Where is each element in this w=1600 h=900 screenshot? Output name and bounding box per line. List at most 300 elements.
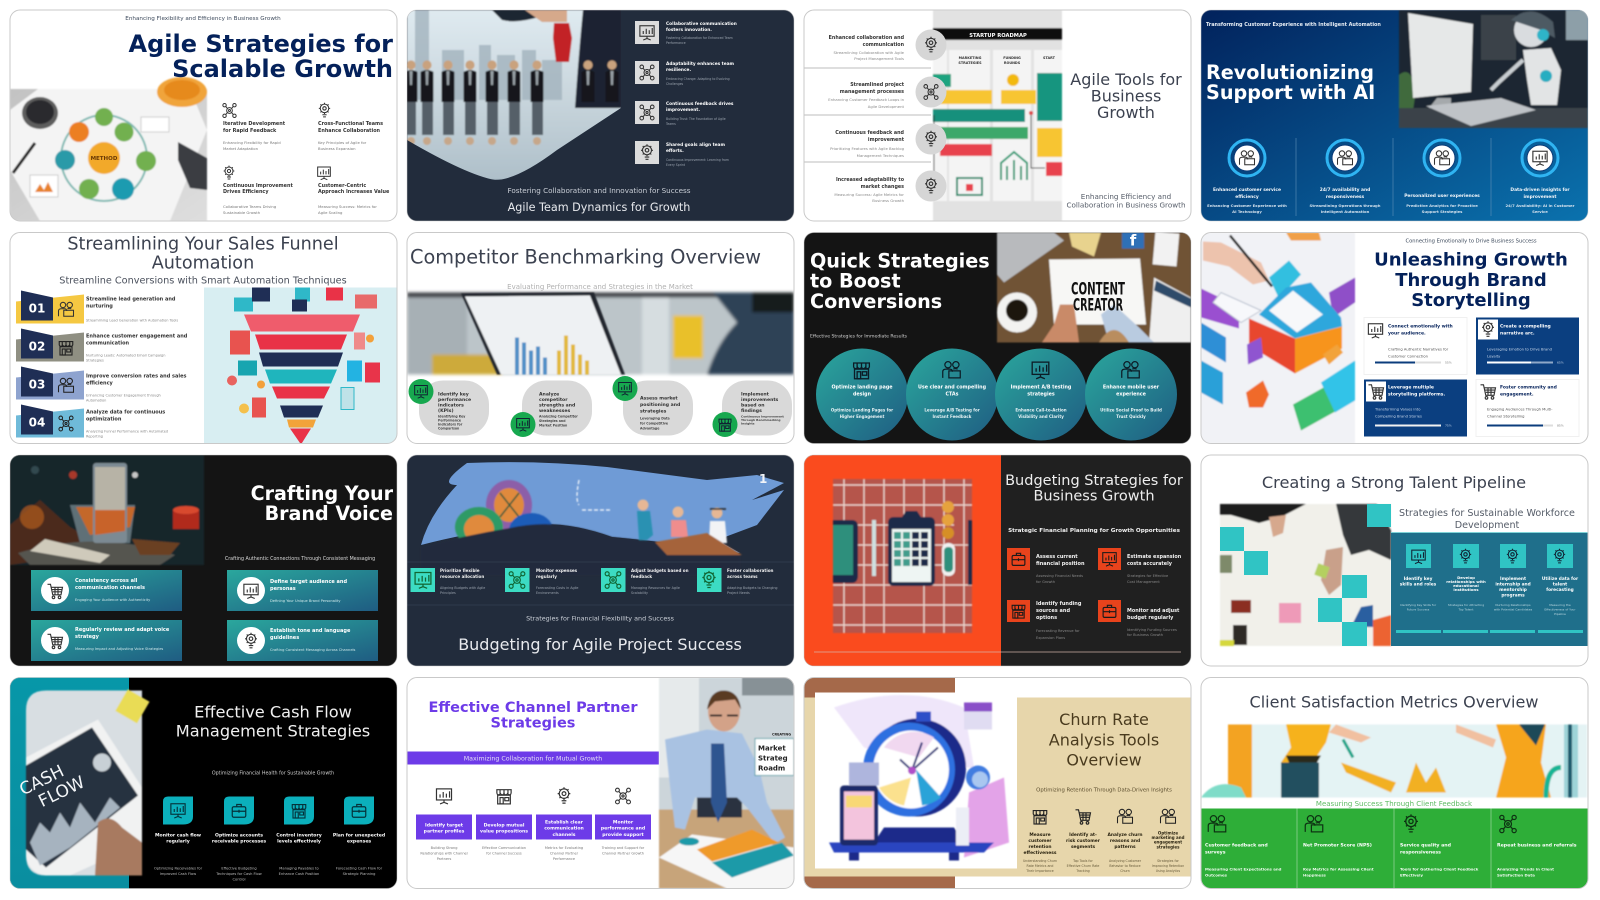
item: measure retention: effectiveness [1024,850,1057,856]
title: Effective Channel Partner [429,700,638,716]
title: Overview [1066,750,1142,770]
slide: Effective Channel Partner Strategies [407,678,794,888]
item: at-risk segments [1066,810,1101,873]
item: monitor performance: Monitor [613,820,634,826]
item: unexpected expenses: Strategic Planning [343,872,375,876]
item: enhanced collaboration: Streamlining Collaboration with Agile [833,50,905,55]
item: data-driven insights: Data-driven insights for [1510,187,1570,193]
title: Agile Tools for [1070,70,1182,89]
item: financial position: for Growth [1036,580,1055,584]
item: iterative development [223,103,286,151]
item: monitor cash flow [154,796,203,876]
title: Revolutionizing [1206,61,1374,84]
item: communication channels: Channel Partner [550,852,579,856]
item: implement improvements [712,380,792,437]
item: foster collaboration [697,568,778,595]
card: connect emotionally: Connect emotionally with [1388,324,1453,330]
item: communication channels: communication [544,826,584,832]
item: enhanced collaboration [829,30,946,61]
item: 24/7 availability: Streamlining Operations through [1310,203,1381,208]
item: enhanced collaboration: Enhanced collaboration and [829,35,905,41]
item: monitor cash flow: Optimizing Receivables for [154,866,203,870]
item: monitor performance: Channel Partner Growth [602,852,644,856]
item: monitor expenses: Environments [536,591,559,595]
item: monitor performance: Training and Support for [601,846,645,850]
item: monitor expenses: Monitor expenses [536,568,578,573]
image: cash flow tablet: FLOW [35,772,88,812]
item: value propositions: Effective Communication [482,846,526,850]
item: estimate expansion costs: Cost Management [1127,580,1160,584]
item: streamlined project management: Enhancing Customer Feedback Loops in [828,97,905,102]
item 02: Nurturing Leads: Automated Email Campaign [86,354,166,358]
subtitle: Optimizing Retention Through Data-Driven Insights [1036,788,1172,794]
item: continuous feedback: Continuous feedback drives [666,101,734,107]
title: Churn Rate [1059,710,1149,729]
item 03: Enhancing Customer Engagement through [86,394,161,398]
item: repeat business: Satisfaction Data [1497,872,1535,878]
item: foster collaboration: across teams [727,574,758,579]
slide: Churn Rate Analysis Tools Overview [804,678,1191,888]
slide: Budgeting for Agile Project Success [407,455,794,666]
item: implement improvements: findings [741,408,762,414]
item: cross-functional teams: Business Expansion [318,146,356,151]
subtitle: Transforming Customer Experience with Intelligent Automation [1206,22,1381,28]
item: internship programs: mentorship [1499,587,1527,593]
item: cross-functional teams [318,103,383,151]
item: continuous feedback: Management Techniques [857,153,904,158]
item: service quality: Tools for Gathering Client Feedback [1400,866,1479,872]
item: marketing strategies: Optimize [1158,830,1178,836]
title: Effective Cash Flow [194,702,352,722]
item: identify KPIs: Indicators for [438,422,463,426]
item: A/B testing [995,348,1087,440]
item: monitor performance: provide support [602,832,645,838]
title: Business [1091,86,1161,106]
item: feedback surveys [1205,816,1282,878]
item: continuous improvement: Drives Efficiency [223,189,269,195]
item: target audience [227,570,378,611]
item: clear CTAs: Use clear and compelling [918,384,987,390]
item: measure retention: retention [1028,844,1052,850]
subtitle: Enhancing Efficiency and [1081,192,1171,201]
item: communication channels [536,787,592,861]
item: personalized experiences: Support Strategies [1422,209,1463,214]
item: talent forecasting: Effectiveness of Your [1544,608,1576,612]
item: enhanced service: Enhanced customer service [1213,187,1281,193]
image: content creator desk: CREATOR [1073,296,1123,316]
item: customer-centric approach: Customer-Centric [318,183,366,189]
panel: strategy columns [1391,532,1588,646]
item: assess market [612,376,693,436]
item: consistency [31,570,182,611]
item: adjust budgets: feedback [631,574,652,579]
item: churn reasons: reasons and [1110,838,1140,844]
item: monitor cash flow: Monitor cash flow [155,832,202,838]
item: educational relationships: Develop [1457,575,1475,580]
card: connect emotionally: Crafting Authentic Narratives for [1388,348,1449,352]
image: man at a marketing roadmap: Market [758,744,786,752]
item: at-risk segments: risk customer [1066,838,1101,844]
card: community and engagement: Foster community and [1500,384,1557,390]
item: identify KPIs: Identify key [438,392,469,398]
slide: Agile Tools for Business Growth [804,10,1191,221]
item: internship programs: with Potential Candidates [1494,608,1533,612]
item 04: Analyzing Funnel Performance with Automated [86,430,168,434]
item: communication channels: channels [552,832,576,838]
item: marketing strategies: strategies [1157,844,1180,850]
item: landing page: Optimize landing page [831,384,893,390]
item: implement improvements: Continuous Improvement [741,414,784,418]
item: adaptability: Embracing Change: Adapting to Evolving [666,77,730,81]
item: estimate expansion costs: Strategies for Effective [1127,574,1169,578]
image: startup roadmap board: STARTUP ROADMAP [969,33,1027,39]
item: control inventory [276,796,322,876]
image: content creator desk [997,232,1191,342]
item: iterative development: Enhancing Flexibility for Rapid [223,140,281,145]
item: A/B testing: Visibility and Clarity [1018,414,1064,419]
item: funding sources [1007,600,1082,640]
item: target audience: Define target audience and [270,579,347,585]
item: partner profiles [416,789,472,861]
item: customer-centric approach: Measuring Success: Metrics for [318,204,377,209]
card: community and engagement: 85% [1557,424,1564,428]
item: personalized experiences [1404,140,1480,214]
item: communication channels: Establish clear [545,820,584,826]
item: foster collaboration: Foster collaboration [727,568,774,573]
item: 24/7 availability: responsiveness [1326,194,1365,200]
card: multiple platforms: storytelling platforms. [1388,392,1445,398]
item: adjust budgets: Managing Resources for Agile [631,586,680,590]
item: churn reasons: Analyzing Customer [1109,859,1142,863]
item: marketing strategies [1152,809,1185,873]
item: cross-functional teams: Key Principles of Agile for [318,140,367,145]
item: tone and language [227,620,378,661]
image: man at a marketing roadmap: Strateg [758,754,788,762]
subtitle: Strategic Financial Planning for Growth Opportunities [1008,528,1181,534]
item: analyze competitor: Market Position [539,424,568,428]
item: tone and language: guidelines [270,635,299,641]
item: repeat business [1497,815,1577,878]
card: compelling narrative: narrative arc. [1500,330,1535,336]
slide: Budgeting Strategies for Business Growth [804,455,1191,666]
slide: Agile Team Dynamics for Growth [404,10,794,221]
title: Support with AI [1206,81,1375,104]
item: analyze competitor: Strategies and [539,419,566,423]
item: at-risk segments: Tracking [1075,869,1090,873]
item 02: Enhance customer engagement and [86,334,188,340]
item: churn reasons [1107,809,1143,873]
item: internship programs [1494,544,1533,612]
item: internship programs: programs [1501,592,1525,598]
item 03 [16,366,186,402]
item: collaborative communication: fosters innovation. [666,27,712,33]
subtitle: Development [1455,520,1520,531]
image: startup roadmap board: MARKETING [959,56,982,60]
item: identify KPIs: Identifying Key [438,414,466,418]
item: collaborative communication: Fostering Collaboration for Enhanced Team [666,36,733,40]
item: educational relationships: Strategies for Attracting [1448,603,1484,607]
subtitle: Streamline Conversions with Smart Automation Techniques [59,276,347,286]
item: accounts receivable [212,796,266,882]
item: service quality: responsiveness [1400,850,1441,856]
card: compelling narrative: 65% [1557,360,1564,364]
item: data-driven insights [1506,140,1575,214]
card: multiple platforms: Leverage multiple [1388,384,1434,390]
image: figurines in a row [404,10,621,180]
item: feedback surveys: Outcomes [1205,872,1228,878]
item: shared goals: Continuous Improvement: Learning from [666,158,729,162]
item: personalized experiences: Personalized user experiences [1404,193,1480,199]
item: internship programs: Implement [1500,576,1526,582]
title: Automation [152,254,254,274]
banner: Maximizing Collaboration for Mutual Growth [464,756,602,762]
image: robot at a desk [1399,10,1588,128]
item: monitor cash flow: regularly [166,838,190,844]
image: isometric colored box [1201,232,1355,444]
title: Competitor Benchmarking Overview [410,246,761,268]
item: identify KPIs [408,379,489,436]
item: data-driven insights: improvement [1523,194,1557,200]
item: service quality: Effectively [1400,872,1423,878]
item: measure retention: Measure [1029,832,1051,838]
item 04: 04 [29,416,45,430]
subtitle: Enhancing Flexibility and Efficiency in Business Growth [125,16,281,22]
item: accounts receivable: receivable processes [212,838,266,844]
item: marketing strategies: engagement [1154,840,1182,844]
item: analyze competitor: competitor [539,397,568,403]
image: team around a table on a brush banner: 1 [759,472,767,486]
item: at-risk segments: Top Tools for [1072,859,1094,863]
subtitle: Measuring Success Through Client Feedback [1316,800,1473,808]
item: at-risk segments: Identify at- [1069,832,1097,838]
item: educational relationships: Top Talent [1458,608,1474,612]
item: funding sources: sources and [1036,608,1070,614]
item: monitor performance: performance and [601,826,645,832]
item: talent forecasting: forecasting [1546,587,1574,593]
item: iterative development: Market Adaptation [223,146,259,151]
item: key skills: Future Success [1407,608,1430,612]
item: adaptability: resilience. [666,67,691,73]
item: enhanced collaboration: communication [863,42,905,48]
title: Management Strategies [176,722,370,740]
item: adaptability: Challenges [666,82,683,86]
item: NPS: Happiness [1303,872,1327,878]
item: monitor and adjust: for Business Growth [1127,633,1163,637]
item: financial position: Assessing Financial Needs [1036,574,1083,578]
item: marketing strategies: marketing and [1152,835,1185,840]
title: Business Growth [1033,488,1155,504]
item: partner profiles: Building Strong [431,846,457,850]
item: churn reasons: Analyze churn [1107,832,1143,838]
item: churn reasons: patterns [1114,844,1136,850]
item: implement improvements: based on [741,402,765,408]
title: Storytelling [1411,290,1531,311]
item: continuous feedback [635,101,734,126]
card: connect emotionally: Customer Connection [1388,354,1429,358]
item: value propositions [476,790,532,856]
item: financial position [1007,548,1085,584]
item: continuous improvement [223,166,293,215]
item: internship programs: Nurturing Relationships [1495,603,1531,607]
item: accounts receivable: Control [232,878,246,882]
item: educational relationships: institutions [1453,587,1479,592]
item: analyze competitor: Analyze [539,392,559,398]
item: target audience: personas [270,586,296,592]
item: flexible allocation [410,568,485,595]
item: streamlined project management: management processes [840,89,904,95]
item: cross-functional teams: Cross-Functional Teams [318,121,383,127]
image: desk with method diagram [10,77,207,221]
item: control inventory: Enhance Cash Position [279,872,319,876]
item: A/B testing: strategies [1027,392,1055,398]
item: customer-centric approach: Approach Increases Value [318,189,390,195]
item: partner profiles: Relationships with Channel [420,852,468,856]
image: man at a marketing roadmap [659,678,794,888]
subtitle: Strategies for Sustainable Workforce [1399,508,1575,519]
card: community and engagement: engagement. [1500,392,1534,398]
item: accounts receivable: Techniques for Cash Flow [215,872,262,876]
slide: Client Satisfaction Metrics Overview [1201,678,1588,888]
item: implement improvements: improvements [741,397,779,403]
item: service quality: Service quality and [1400,842,1451,848]
item: identify KPIs: (KPIs) [438,408,454,414]
title: Unleashing Growth [1374,250,1568,270]
item: mobile experience: Utilize Social Proof to Build [1100,408,1162,412]
item: enhanced service: efficiency [1235,194,1259,200]
item: at-risk segments: segments [1071,844,1095,850]
item: talent forecasting: Pipeline [1554,612,1566,616]
image: clipboard on a grid [833,479,972,633]
slide: Agile Strategies for Scalable Growth [10,10,397,221]
item: iterative development: Iterative Development [223,121,286,127]
item: key skills: Identifying Key Skills for [1400,603,1437,607]
card: community and engagement [1476,380,1579,436]
image: cash flow tablet [16,689,149,876]
item: measure retention: Rate Metrics and [1027,864,1053,868]
item: collaborative communication [635,21,737,45]
item: shared goals [635,141,729,167]
item: key skills [1400,544,1437,612]
card: connect emotionally: 55% [1445,360,1452,364]
item: marketing strategies: Using Analytics [1156,869,1181,873]
card: multiple platforms: Compelling Brand Stories [1375,414,1422,418]
item: continuous improvement: Collaborative Teams Driving [223,204,277,209]
item: control inventory: levels effectively [277,838,321,844]
item: tone and language: Crafting Consistent Messaging Across Channels [270,648,356,652]
slide: Crafting Your Brand Voice [10,455,397,666]
subtitle: Collaboration in Business Growth [1066,200,1186,210]
item: unexpected expenses [333,796,385,876]
item: iterative development: for Rapid Feedback [223,128,277,134]
item: talent forecasting: Measuring the [1549,603,1571,607]
title: Growth [1097,103,1155,122]
card: community and engagement: Engaging Audiences Through Multi- [1487,408,1553,412]
item: marketing strategies: Improving Retention [1152,864,1184,868]
card: multiple platforms [1364,380,1467,436]
item: flexible allocation: Aligning Budgets with Agile [440,586,485,590]
card: connect emotionally: your audience. [1388,330,1426,336]
item: control inventory: Managing Payables to [279,866,319,870]
card: compelling narrative: Loyalty [1487,354,1501,358]
item: measure retention [1023,810,1057,873]
item: assess market: strategies [640,408,667,414]
title: Agile Strategies for [129,30,393,58]
image: stopwatch illustration [815,692,1017,868]
item: churn reasons: Churn [1120,869,1130,873]
title: to Boost [810,270,901,292]
card: compelling narrative [1476,318,1579,374]
item: shared goals: Shared goals align team [666,142,725,148]
subtitle: Connecting Emotionally to Drive Business Success [1405,238,1537,244]
item: adjust budgets [601,568,689,595]
slide: Quick Strategies to Boost Conversions [804,232,1191,444]
item: measure retention: customer [1028,838,1052,844]
item: consistency: Engaging Your Audience with Authenticity [75,598,151,602]
item: 24/7 availability: 24/7 availability and [1320,187,1370,193]
item: funding sources: options [1036,615,1057,621]
slide: Agile Strategies for Scalable Growth: METHOD [91,156,118,162]
item: landing page: Higher Engagement [840,414,885,419]
item: financial position: Assess current [1036,554,1078,560]
item: talent forecasting: talent [1553,582,1567,588]
title: Agile Team Dynamics for Growth [508,201,690,214]
card: multiple platforms: 75% [1445,424,1452,428]
image: tablet with charts [407,292,794,374]
item 01 [16,290,178,324]
item: talent forecasting [1542,544,1579,616]
item: unexpected expenses: Plan for unexpected [333,832,385,838]
title: Brand Voice [265,502,393,525]
image: man at a marketing roadmap: CREATING [772,732,791,736]
slide: Effective Cash Flow Management Strategies [10,678,397,888]
item 03: Automation [86,398,106,402]
item: continuous feedback: Teams [665,122,676,126]
item: partner profiles: Identify target [425,822,464,828]
item: continuous feedback: Continuous feedback and [835,130,905,136]
item: measure retention: Their Importance [1025,869,1054,873]
item: value propositions: Develop mutual [484,822,525,828]
item 03: Improve conversion rates and sales [86,374,186,380]
item: analyze competitor: weaknesses [539,408,570,414]
item 01: Streamline lead generation and [86,296,176,302]
item 01: 01 [29,302,45,316]
item: 24/7 availability [1310,140,1381,214]
item: monitor expenses: regularly [536,574,557,579]
item: educational relationships: educational [1453,583,1479,588]
item: clear CTAs: Leverage A/B Testing for [924,408,980,412]
item: implement improvements: Insights [741,422,755,426]
item: 24/7 availability: Intelligent Automation [1321,209,1370,214]
title: Client Satisfaction Metrics Overview [1250,692,1538,712]
item: monitor performance [595,788,651,856]
item: value propositions: for Channel Success [486,852,522,856]
image: content creator desk: f [1130,232,1137,250]
item: monitor expenses: Forecasting Costs in Agile [536,586,578,590]
title: Budgeting for Agile Project Success [458,635,742,654]
item: review voice strategy: Regularly review and adapt voice [75,627,170,633]
item: A/B testing: Enhance Call-to-Action [1015,408,1067,412]
item: shared goals: Every Sprint [666,163,686,167]
item: enhanced service: Enhancing Customer Experience with [1207,203,1287,208]
card: community and engagement: Channel Storytelling [1487,414,1525,418]
item: assess market: for Competitive [640,422,668,426]
item 02 [16,328,188,362]
item: A/B testing: Implement A/B testing [1011,384,1072,390]
item: value propositions: value propositions [480,828,528,834]
title: Scalable Growth [172,55,393,83]
image: cash flow tablet: CASH [16,761,67,800]
item: educational relationships: relationships with [1446,579,1486,584]
